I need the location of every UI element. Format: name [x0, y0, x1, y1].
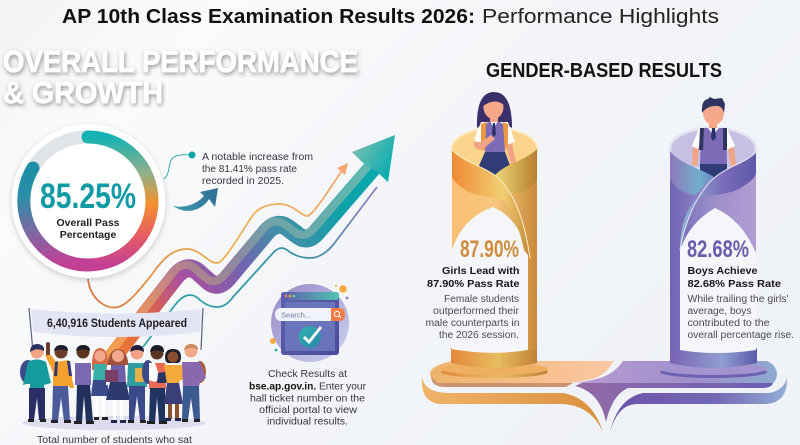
student 8: [164, 349, 184, 421]
students banner: [29, 308, 203, 352]
portal instructions: [249, 368, 366, 428]
donut: overall pass percentage: [12, 124, 166, 278]
rim: [452, 128, 538, 170]
subheading: Girls Lead with: [442, 265, 520, 277]
portal instructions: bse.ap.gov.in. Enter your: [249, 380, 366, 392]
rising ribbon: [102, 162, 375, 367]
description: [688, 294, 794, 341]
student 9: [182, 344, 206, 422]
title: AP 10th Class Examination Results 2026:: [62, 6, 475, 28]
portal instructions: individual results.: [267, 416, 348, 428]
subheading: 82.68% Pass Rate: [688, 278, 781, 290]
boys result text: [687, 236, 794, 341]
arch cutout: [680, 208, 756, 353]
description: [426, 294, 520, 341]
orange platform: [430, 361, 614, 383]
heading: gender-based results: GENDER-BASED RESULTS: [486, 60, 722, 82]
pillar: boys: [660, 97, 767, 378]
student 3: [72, 345, 96, 424]
girls result text: [426, 236, 520, 341]
ribbon edge: [452, 150, 530, 258]
subheading: [427, 265, 520, 290]
centre split: [575, 383, 773, 422]
description: contributed to the: [688, 318, 770, 329]
heading: overall performance and growth: & GROWTH: [3, 75, 163, 110]
ribbon edge: [680, 152, 756, 250]
teal and purple trend line: [143, 187, 377, 347]
donut: overall pass percentage: Percentage: [60, 229, 116, 241]
description: male counterparts in: [426, 318, 520, 329]
purple platform: [577, 361, 777, 383]
callout text: [202, 152, 313, 187]
orange trend line: [88, 163, 348, 307]
label: Overall Pass: [56, 217, 120, 229]
arch cutout: [452, 207, 528, 353]
heading: overall performance and growth: OVERALL PERFORMANCE: [3, 44, 358, 79]
title: [62, 6, 719, 28]
girl figure: [474, 92, 516, 177]
student 7: [142, 345, 170, 424]
description: average, boys: [688, 306, 752, 317]
pillar base: [660, 347, 767, 378]
description: Female students: [444, 294, 519, 305]
value: 87.90%: [460, 236, 519, 263]
pillar body: [452, 150, 537, 350]
pillar base: [441, 347, 548, 378]
students group: [20, 342, 206, 430]
purple sweep: [610, 377, 787, 432]
portal instructions: Check Results at: [268, 368, 347, 380]
value: 82.68%: [687, 236, 749, 263]
callout connector: [164, 152, 196, 179]
rim: [670, 128, 756, 170]
portal instructions: official portal to view: [259, 404, 357, 416]
check mark: [299, 326, 321, 348]
value: 85.25%: [40, 177, 136, 216]
right ribbon: [680, 152, 756, 250]
boy figure: [692, 97, 736, 178]
search bar: Search...: [281, 312, 311, 320]
orange sweep: [422, 377, 603, 432]
description: the 2026 session.: [439, 330, 519, 341]
subheading: [688, 265, 781, 290]
student 4: [91, 348, 109, 420]
description: overall percentage rise.: [688, 330, 794, 341]
arrowhead: [352, 135, 395, 182]
student 5: [105, 349, 130, 423]
subheading: Boys Achieve: [688, 265, 758, 277]
pillar: girls: [441, 92, 548, 378]
callout text: the 81.41% pass rate: [202, 164, 297, 175]
left ribbon: [670, 151, 714, 195]
icon: results portal: [270, 284, 349, 362]
description: While trailing the girls': [688, 294, 789, 305]
portal instructions: hall ticket number on the: [250, 392, 365, 404]
curved callout arrow: [173, 188, 218, 211]
student 1: [20, 344, 51, 422]
callout text: recorded in 2025.: [202, 176, 284, 187]
student 6: [127, 345, 147, 423]
pillar body: [670, 150, 756, 350]
callout text: A notable increase from: [202, 152, 313, 163]
left ribbon: [452, 150, 530, 258]
heading: overall performance and growth: [3, 44, 358, 110]
student 2: [45, 342, 74, 423]
subheading: 87.90% Pass Rate: [427, 278, 520, 290]
description: outperformed their: [433, 306, 520, 317]
title: Performance Highlights: [482, 6, 719, 28]
growth arrow chart: [88, 135, 395, 367]
students banner: 6,40,916 Students Appeared: [47, 318, 187, 330]
platform base: [422, 361, 787, 432]
right ribbon: [495, 149, 537, 194]
